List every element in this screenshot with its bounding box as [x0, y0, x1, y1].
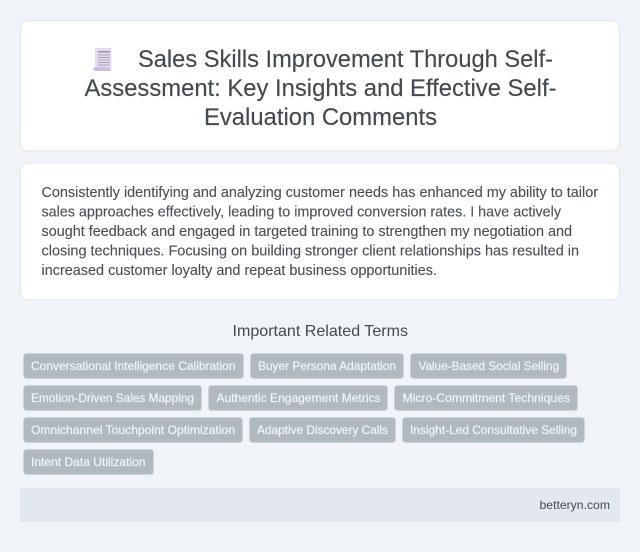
text block: summary paragraph: sales approaches effectively, leading to improved conversion rates. I have actively	[42, 204, 562, 220]
tag: Authentic Engagement Metrics: Authentic Engagement Metrics	[216, 391, 380, 405]
tag: Intent Data Utilization: Intent Data Utilization	[31, 455, 146, 469]
tags: related terms	[24, 354, 584, 474]
text block: summary paragraph: increased customer loyalty and repeat business opportunities.	[42, 263, 437, 279]
heading: important related terms: Important Related Terms	[232, 323, 408, 340]
title: Sales Skills Improvement Through Self-	[138, 46, 553, 73]
text block: summary paragraph: Consistently identifying and analyzing customer needs has enhanced my ability to tailor	[42, 185, 598, 201]
tag: Emotion-Driven Sales Mapping: Emotion-Driven Sales Mapping	[31, 391, 194, 405]
tag: Emotion-Driven Sales Mapping	[24, 386, 202, 410]
text block: summary paragraph: sought feedback and engaged in targeted training to strengthen my negotiation and	[42, 224, 572, 240]
footer	[20, 488, 620, 522]
title	[84, 46, 556, 131]
title: Evaluation Comments	[204, 104, 437, 131]
tag: Conversational Intelligence Calibration: Conversational Intelligence Calibration	[31, 359, 236, 373]
title: Assessment: Key Insights and Effective Self-	[84, 75, 556, 102]
tag: Omnichannel Touchpoint Optimization	[24, 418, 242, 442]
panel: self-assessment summary	[20, 163, 620, 300]
tag: Value-Based Social Selling: Value-Based Social Selling	[418, 359, 559, 373]
tag: Insight-Led Consultative Selling	[402, 418, 584, 442]
text block: summary paragraph	[42, 185, 598, 279]
tag: Micro-Commitment Techniques	[394, 386, 578, 410]
text block: summary paragraph: closing techniques. Focusing on building stronger client relationships has resulted in	[42, 244, 579, 260]
tag: Micro-Commitment Techniques: Micro-Commitment Techniques	[402, 391, 570, 405]
footer source text: betteryn.com	[540, 498, 610, 512]
tag: Omnichannel Touchpoint Optimization: Omnichannel Touchpoint Optimization	[31, 423, 235, 437]
tag: Adaptive Discovery Calls	[250, 418, 396, 442]
icon: receipt scroll	[93, 48, 112, 71]
tag: Insight-Led Consultative Selling: Insight-Led Consultative Selling	[410, 423, 577, 437]
tag: Conversational Intelligence Calibration	[24, 354, 244, 378]
tag: Buyer Persona Adaptation: Buyer Persona Adaptation	[258, 359, 396, 373]
tag: Adaptive Discovery Calls: Adaptive Discovery Calls	[257, 423, 388, 437]
tag: Buyer Persona Adaptation	[250, 354, 404, 378]
tag: Value-Based Social Selling	[410, 354, 566, 378]
tag: Intent Data Utilization	[24, 450, 154, 474]
tag: Authentic Engagement Metrics	[208, 386, 388, 410]
panel: title card	[20, 20, 620, 151]
